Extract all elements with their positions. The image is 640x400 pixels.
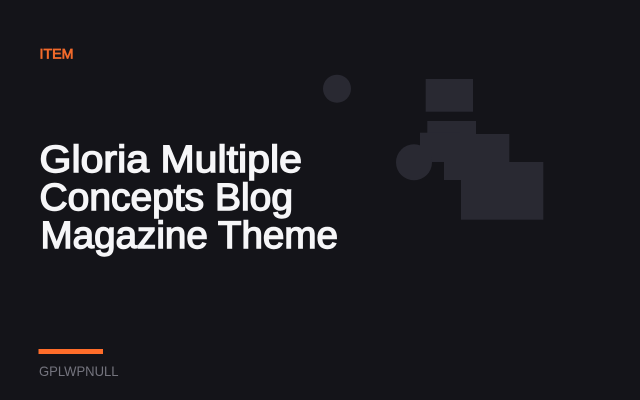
category label: ITEM [40,46,74,62]
title [40,139,338,257]
title: Magazine Theme [40,215,338,257]
accent bar [38,349,103,354]
decorative shapes [323,75,543,220]
title: Gloria Multiple [40,139,302,181]
footer label: GPLWPNULL [39,363,119,379]
title: Concepts Blog [40,177,293,219]
